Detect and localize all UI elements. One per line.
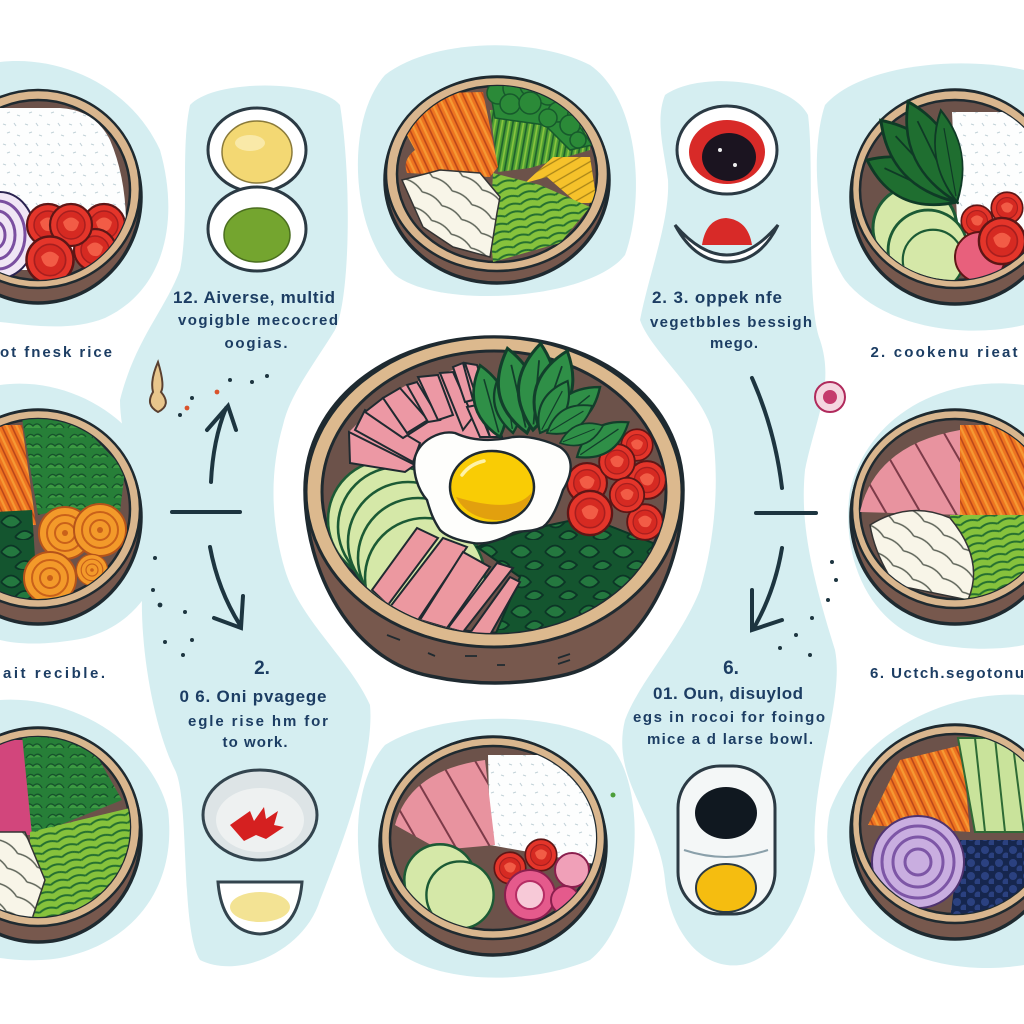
ham [395, 760, 495, 850]
yellow strips [525, 157, 597, 203]
cabbage [402, 170, 500, 257]
cucumber sticks [958, 738, 1024, 832]
text block: step 2.3: 2. 3. oppek nfe [652, 288, 782, 307]
carrots [403, 92, 498, 177]
bowl: ham, rice, cucumber, radish (bottom centre) [380, 737, 606, 955]
text block: step 2: 0 6. Oni pvagege [180, 687, 326, 706]
tomatoes [567, 429, 666, 540]
bowl body [305, 337, 683, 683]
tomatoes and radish [494, 839, 589, 920]
text block: step 2: 2. [254, 658, 270, 679]
small dish: red threads [203, 770, 317, 860]
text block: step 6: mice a d larse bowl. [647, 731, 813, 748]
divider [756, 511, 816, 515]
purple onion [872, 816, 964, 908]
label: middle right bowl: 6. Uctch.segotonu [870, 665, 1024, 682]
dark spinach [0, 510, 35, 599]
text block: step 12: oogias. [224, 335, 288, 352]
bowl: rice and tomatoes (top left) [0, 90, 141, 303]
tomatoes [26, 204, 125, 284]
cabbage [0, 832, 45, 925]
text block: step 12 [173, 288, 338, 352]
bowl: carrot, cucumber, onion, berries (bottom right) [851, 725, 1024, 939]
rice [0, 108, 126, 270]
right flow marks [610, 378, 845, 798]
small dish: cream sauce [218, 882, 302, 934]
text block: step 12: 12. Aiverse, multid [173, 288, 335, 307]
cucumbers [328, 460, 485, 638]
scattered dots [778, 560, 838, 657]
sprouts [490, 173, 590, 262]
carrots [0, 425, 36, 525]
broccoli [486, 86, 592, 151]
text block: step 2.3 [650, 288, 812, 352]
text block: step 2.3: vegetbbles bessigh [650, 314, 812, 331]
orange spirals [24, 504, 126, 604]
label: middle left bowl: ait recible. [3, 665, 105, 682]
text block: step 12: vogigble mecocred [178, 312, 338, 329]
text block: step 2: egle rise hm for [188, 713, 328, 730]
scattered dots [151, 374, 269, 657]
cucumbers [872, 192, 966, 280]
rice [488, 755, 600, 865]
pink radish [0, 740, 32, 835]
herb stems [490, 110, 590, 172]
left flow marks [150, 362, 269, 657]
purple onion [0, 192, 35, 278]
arrow up [207, 406, 236, 482]
text block: step 6: 01. Oun, disuylod [653, 684, 803, 703]
small dish: dark red sauce [677, 106, 777, 194]
herbs [22, 418, 125, 515]
rice [952, 112, 1024, 240]
carrots [960, 425, 1024, 515]
tomatoes [955, 192, 1024, 282]
text block: step 2.3: mego. [710, 335, 758, 352]
main bowl: bibimbap with fried egg [305, 337, 683, 683]
label: top left bowl: ot fnesk rice [0, 344, 112, 361]
carrots [868, 745, 970, 832]
arrow down [752, 548, 782, 630]
cucumbers [404, 844, 494, 929]
spinach leaves [859, 93, 974, 220]
ham top [349, 363, 502, 472]
bowl: spinach, rice, cucumber (top right) [851, 90, 1024, 304]
sprouts [950, 515, 1024, 599]
spinach leaves [465, 342, 636, 468]
small spoon with tomato [675, 218, 778, 262]
bottom ham [372, 528, 520, 635]
bowl: mixed vegetables (top centre) [385, 73, 609, 283]
divider [172, 510, 240, 514]
text block: step 2 [180, 658, 328, 751]
berries [950, 840, 1024, 920]
dark spinach [477, 517, 653, 640]
bowl: greens and cabbage (bottom left) [0, 728, 141, 942]
text block: step 6 [633, 658, 825, 748]
bowl: vegetables (middle left) [0, 410, 141, 624]
fried egg [414, 432, 571, 543]
herbs [22, 735, 122, 835]
cabbage [870, 510, 974, 600]
sprouts [30, 808, 130, 920]
divided dish: soy sauce and yolk [678, 766, 775, 914]
curved line [752, 378, 782, 488]
small radish icon [815, 382, 845, 412]
label: top right bowl: 2. cookenu rieat [870, 344, 1018, 361]
text block: step 6: 6. [723, 658, 739, 679]
ham [860, 430, 965, 515]
bowl: ham and carrots (middle right) [851, 410, 1024, 624]
small dish: yellow sauce [208, 108, 306, 192]
rim ticks [387, 635, 570, 665]
text block: step 2: to work. [222, 734, 288, 751]
small dish: green sauce [208, 187, 306, 271]
text block: step 6: egs in rocoi for foingo [633, 709, 825, 726]
spoon icon [150, 362, 166, 412]
arrow down [210, 547, 243, 628]
